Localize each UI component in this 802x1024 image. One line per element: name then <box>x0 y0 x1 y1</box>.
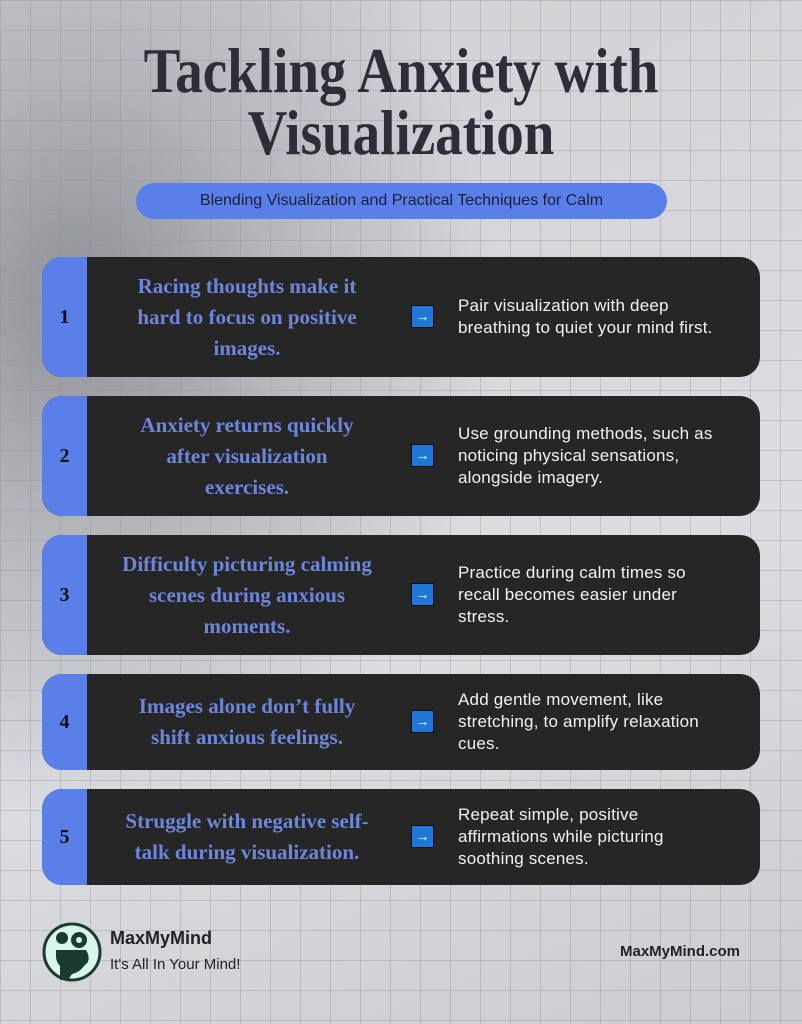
card 3: Practice during calm times so <box>458 563 686 582</box>
card 5: → <box>416 828 430 844</box>
title <box>144 35 658 168</box>
card 5: talk during visualization. <box>135 840 359 864</box>
card 1: → <box>416 308 430 324</box>
card 4: shift anxious feelings. <box>151 725 343 749</box>
card 3: Difficulty picturing calming <box>122 552 372 576</box>
card 1: hard to focus on positive <box>137 304 357 328</box>
card 2: alongside imagery. <box>458 468 603 487</box>
website url: MaxMyMind.com <box>620 943 740 960</box>
card 2: after visualization <box>166 444 328 468</box>
card 3: 3 <box>60 584 70 606</box>
card 1: 1 <box>60 306 70 328</box>
card 2: 2 <box>60 444 70 466</box>
card 4: stretching, to amplify relaxation <box>458 712 699 731</box>
logo icon <box>42 922 102 982</box>
brand name: MaxMyMind <box>110 928 212 948</box>
title: Tackling Anxiety with <box>144 35 658 106</box>
card 3: moments. <box>204 614 290 638</box>
card 3: stress. <box>458 607 509 626</box>
card 4: Add gentle movement, like <box>458 690 663 709</box>
card 1: Pair visualization with deep <box>458 296 669 315</box>
card 1: images. <box>213 336 281 360</box>
card 3: scenes during anxious <box>149 582 345 606</box>
title: Visualization <box>248 97 554 168</box>
card 2: → <box>416 447 430 463</box>
card 2: exercises. <box>205 474 289 498</box>
card 4: → <box>416 713 430 729</box>
card 5: Struggle with negative self- <box>125 809 369 833</box>
card 4: Images alone don’t fully <box>139 694 355 718</box>
card 3: recall becomes easier under <box>458 585 677 604</box>
card 2: Use grounding methods, such as <box>458 424 713 443</box>
subtitle pill <box>136 183 667 219</box>
card 4: 4 <box>60 710 70 732</box>
card 3 <box>42 535 760 655</box>
subtitle pill: Blending Visualization and Practical Techniques for Calm <box>200 192 603 209</box>
card 1: breathing to quiet your mind first. <box>458 318 713 337</box>
card 3: → <box>416 586 430 602</box>
card 5: Repeat simple, positive <box>458 805 638 824</box>
card 4 <box>42 674 760 770</box>
card 5 <box>42 789 760 885</box>
card 1: Racing thoughts make it <box>138 274 356 298</box>
card 1 <box>42 257 760 377</box>
tagline: It's All In Your Mind! <box>110 956 240 973</box>
card 2: noticing physical sensations, <box>458 446 679 465</box>
card 2: Anxiety returns quickly <box>140 412 354 436</box>
card 2 <box>42 396 760 516</box>
card 5: soothing scenes. <box>458 849 589 868</box>
card 4: cues. <box>458 734 500 753</box>
card 5: affirmations while picturing <box>458 827 664 846</box>
card 5: 5 <box>60 826 70 848</box>
